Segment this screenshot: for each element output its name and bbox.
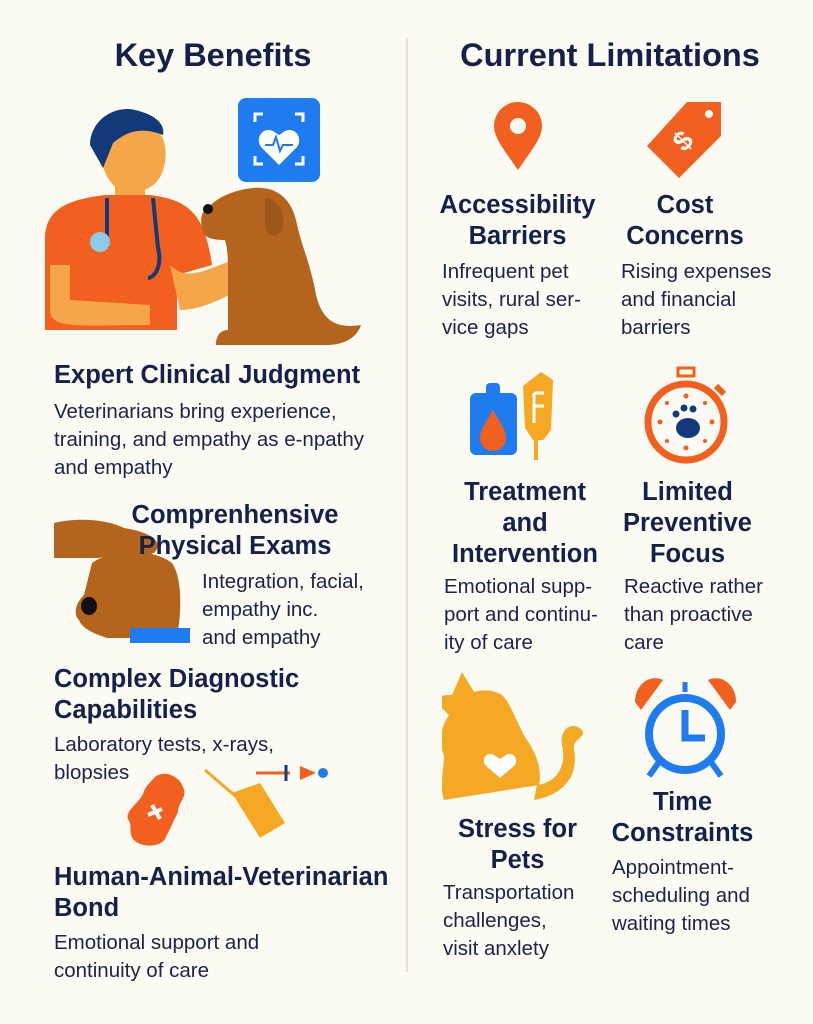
heading: Time Constraints: Time <box>653 788 712 816</box>
text: stress body <box>443 881 574 960</box>
divider <box>406 38 408 972</box>
illustration: vet and dog <box>44 98 361 345</box>
text: bond body: Emotional support and <box>54 931 259 954</box>
heading: Human-Animal-Veterinarian Bond: Human-Animal-Veterinarian <box>54 863 388 891</box>
heading: Limited Preventive Focus: Limited <box>642 478 733 506</box>
heading: Stress for Pets: Stress for <box>458 815 577 843</box>
text: cost body <box>621 260 771 339</box>
icon: cat <box>442 672 583 800</box>
heading: Comprehensive Physical Exams: Physical Exams <box>139 532 331 560</box>
icon: location pin <box>494 102 542 170</box>
text: treatment body: port and continu- <box>444 603 598 626</box>
heading: Stress for Pets <box>458 815 577 874</box>
icon: IV bag and syringe <box>470 372 553 460</box>
heading: Time Constraints: Constraints <box>612 819 753 847</box>
icon: price tag: $ <box>666 124 700 157</box>
icon: stopwatch with paw <box>644 366 728 464</box>
text: expert body <box>54 400 364 479</box>
heading: Complex Diagnostic: Capabilities <box>54 696 197 724</box>
heading: Complex Diagnostic: Complex Diagnostic <box>54 665 299 693</box>
title: Key Benefits: Key Benefits <box>115 37 311 73</box>
text: exams body: empathy inc. <box>202 598 318 621</box>
icons: bone, syringe, arrow <box>128 765 328 846</box>
text: expert body: training, and empathy as e-npathy <box>54 428 364 451</box>
heading: Stress for Pets: Pets <box>491 846 544 874</box>
heading: Limited Preventive Focus: Preventive <box>623 509 752 537</box>
heading: Limited Preventive Focus: Focus <box>650 540 725 568</box>
heading: Complex Diagnostic <box>54 665 299 724</box>
heading: Accessibility Barriers: Accessibility <box>440 191 595 219</box>
text: preventive body: care <box>624 631 664 654</box>
text: cost body: barriers <box>621 316 690 339</box>
heading: Human-Animal-Veterinarian Bond <box>54 863 388 922</box>
text: accessibility body: visits, rural ser- <box>442 288 581 311</box>
text: bond body <box>54 931 259 982</box>
text: time body: Appointment- <box>612 856 734 879</box>
title: Current Limitations: Current Limitations <box>460 37 760 73</box>
icon: hand on dog <box>54 520 190 643</box>
text: expert body: and empathy <box>54 456 173 479</box>
heading: Human-Animal-Veterinarian Bond: Bond <box>54 894 119 922</box>
heading: Treatment and Intervention <box>452 478 598 568</box>
text: cost body: Rising expenses <box>621 260 771 283</box>
text: bond body: continuity of care <box>54 959 209 982</box>
text: stress body: Transportation <box>443 881 574 904</box>
text: diagnostic body <box>54 733 274 784</box>
text: exams body: Integration, facial, <box>202 570 364 593</box>
heading: Accessibility Barriers <box>440 191 596 250</box>
text: time body <box>612 856 750 935</box>
text: diagnostic body: Laboratory tests, x-rays, <box>54 733 274 756</box>
text: time body: waiting times <box>612 912 730 935</box>
dog <box>201 188 361 345</box>
heading: Treatment and Intervention: and <box>502 509 548 537</box>
text: accessibility body <box>442 260 581 339</box>
text: accessibility body: vice gaps <box>442 316 529 339</box>
heading: Time Constraints <box>612 788 753 847</box>
heading: Cost Concerns <box>626 191 744 250</box>
text: preventive body: than proactive <box>624 603 753 626</box>
heading: Expert Clinical Judgment: Expert Clinical Judgment <box>54 361 360 389</box>
text: cost body: and financial <box>621 288 736 311</box>
heading: Comprehensive Physical Exams <box>132 501 338 560</box>
heading: Cost Concerns: Concerns <box>626 222 744 250</box>
text: expert body: Veterinarians bring experience, <box>54 400 337 423</box>
text: accessibility body: Infrequent pet <box>442 260 569 283</box>
text: treatment body: Emotional supp- <box>444 575 592 598</box>
heading: Accessibility Barriers: Barriers <box>469 222 566 250</box>
text: preventive body: Reactive rather <box>624 575 763 598</box>
heading: Treatment and Intervention: Intervention <box>452 540 598 568</box>
text: treatment body: ity of care <box>444 631 533 654</box>
text: treatment body <box>444 575 598 654</box>
text: diagnostic body: blopsies <box>54 761 129 784</box>
heading: Cost Concerns: Cost <box>657 191 713 219</box>
heading: Treatment and Intervention: Treatment <box>464 478 586 506</box>
text: exams body: and empathy <box>202 626 321 649</box>
icon: heart monitor <box>238 98 320 182</box>
text: time body: scheduling and <box>612 884 750 907</box>
heading: Comprehensive Physical Exams: Comprenhensive <box>132 501 338 529</box>
text: stress body: visit anxlety <box>443 937 549 960</box>
text: preventive body <box>624 575 763 654</box>
text: stress body: challenges, <box>443 909 547 932</box>
text: exams body <box>202 570 364 649</box>
icon: alarm clock <box>635 678 736 778</box>
heading: Limited Preventive Focus <box>623 478 752 568</box>
icon: price tag <box>647 102 721 178</box>
